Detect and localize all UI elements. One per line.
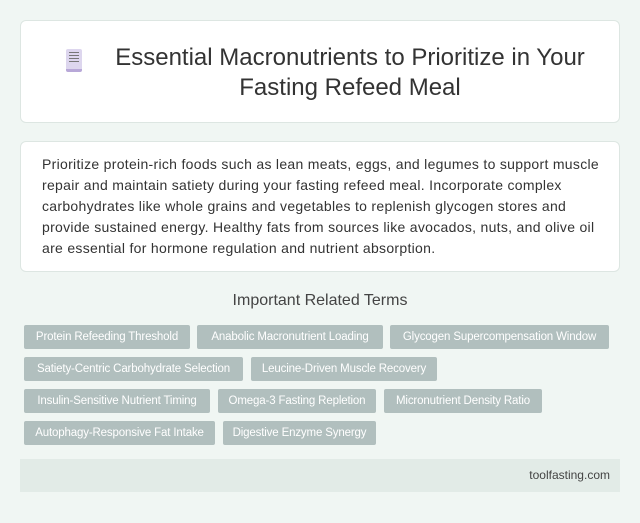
footer (20, 459, 620, 492)
tags: Anabolic Macronutrient Loading (211, 331, 369, 343)
tags: Omega-3 Fasting Repletion (229, 395, 365, 407)
tags: Glycogen Supercompensation Window (403, 331, 596, 343)
header card (20, 20, 620, 123)
footer: toolfasting.com (529, 468, 610, 482)
related terms heading: Important Related Terms (233, 292, 407, 309)
tags: Insulin-Sensitive Nutrient Timing (37, 395, 197, 407)
icon: document (66, 49, 82, 72)
tags: Digestive Enzyme Synergy (233, 427, 366, 439)
tags: Leucine-Driven Muscle Recovery (262, 363, 426, 375)
tags: Protein Refeeding Threshold (36, 331, 178, 343)
title: Essential Macronutrients to Prioritize in Your Fasting Refeed Meal (115, 44, 585, 101)
description text: Prioritize protein-rich foods such as lean meats, eggs, and legumes to support muscle repair and maintain satiety during your fasting refeed meal. Incorporate complex carbohydrates like whole grains and vegetables to replenish glycogen stores and provide sustained energy. Healthy fats from sources like avocados, nuts, and olive oil are essential for hormone regulation and nutrient absorption. (42, 156, 599, 256)
tags: Micronutrient Density Ratio (396, 395, 530, 407)
description card (20, 141, 620, 272)
tags: Autophagy-Responsive Fat Intake (35, 427, 204, 439)
tags: Satiety-Centric Carbohydrate Selection (37, 363, 230, 375)
